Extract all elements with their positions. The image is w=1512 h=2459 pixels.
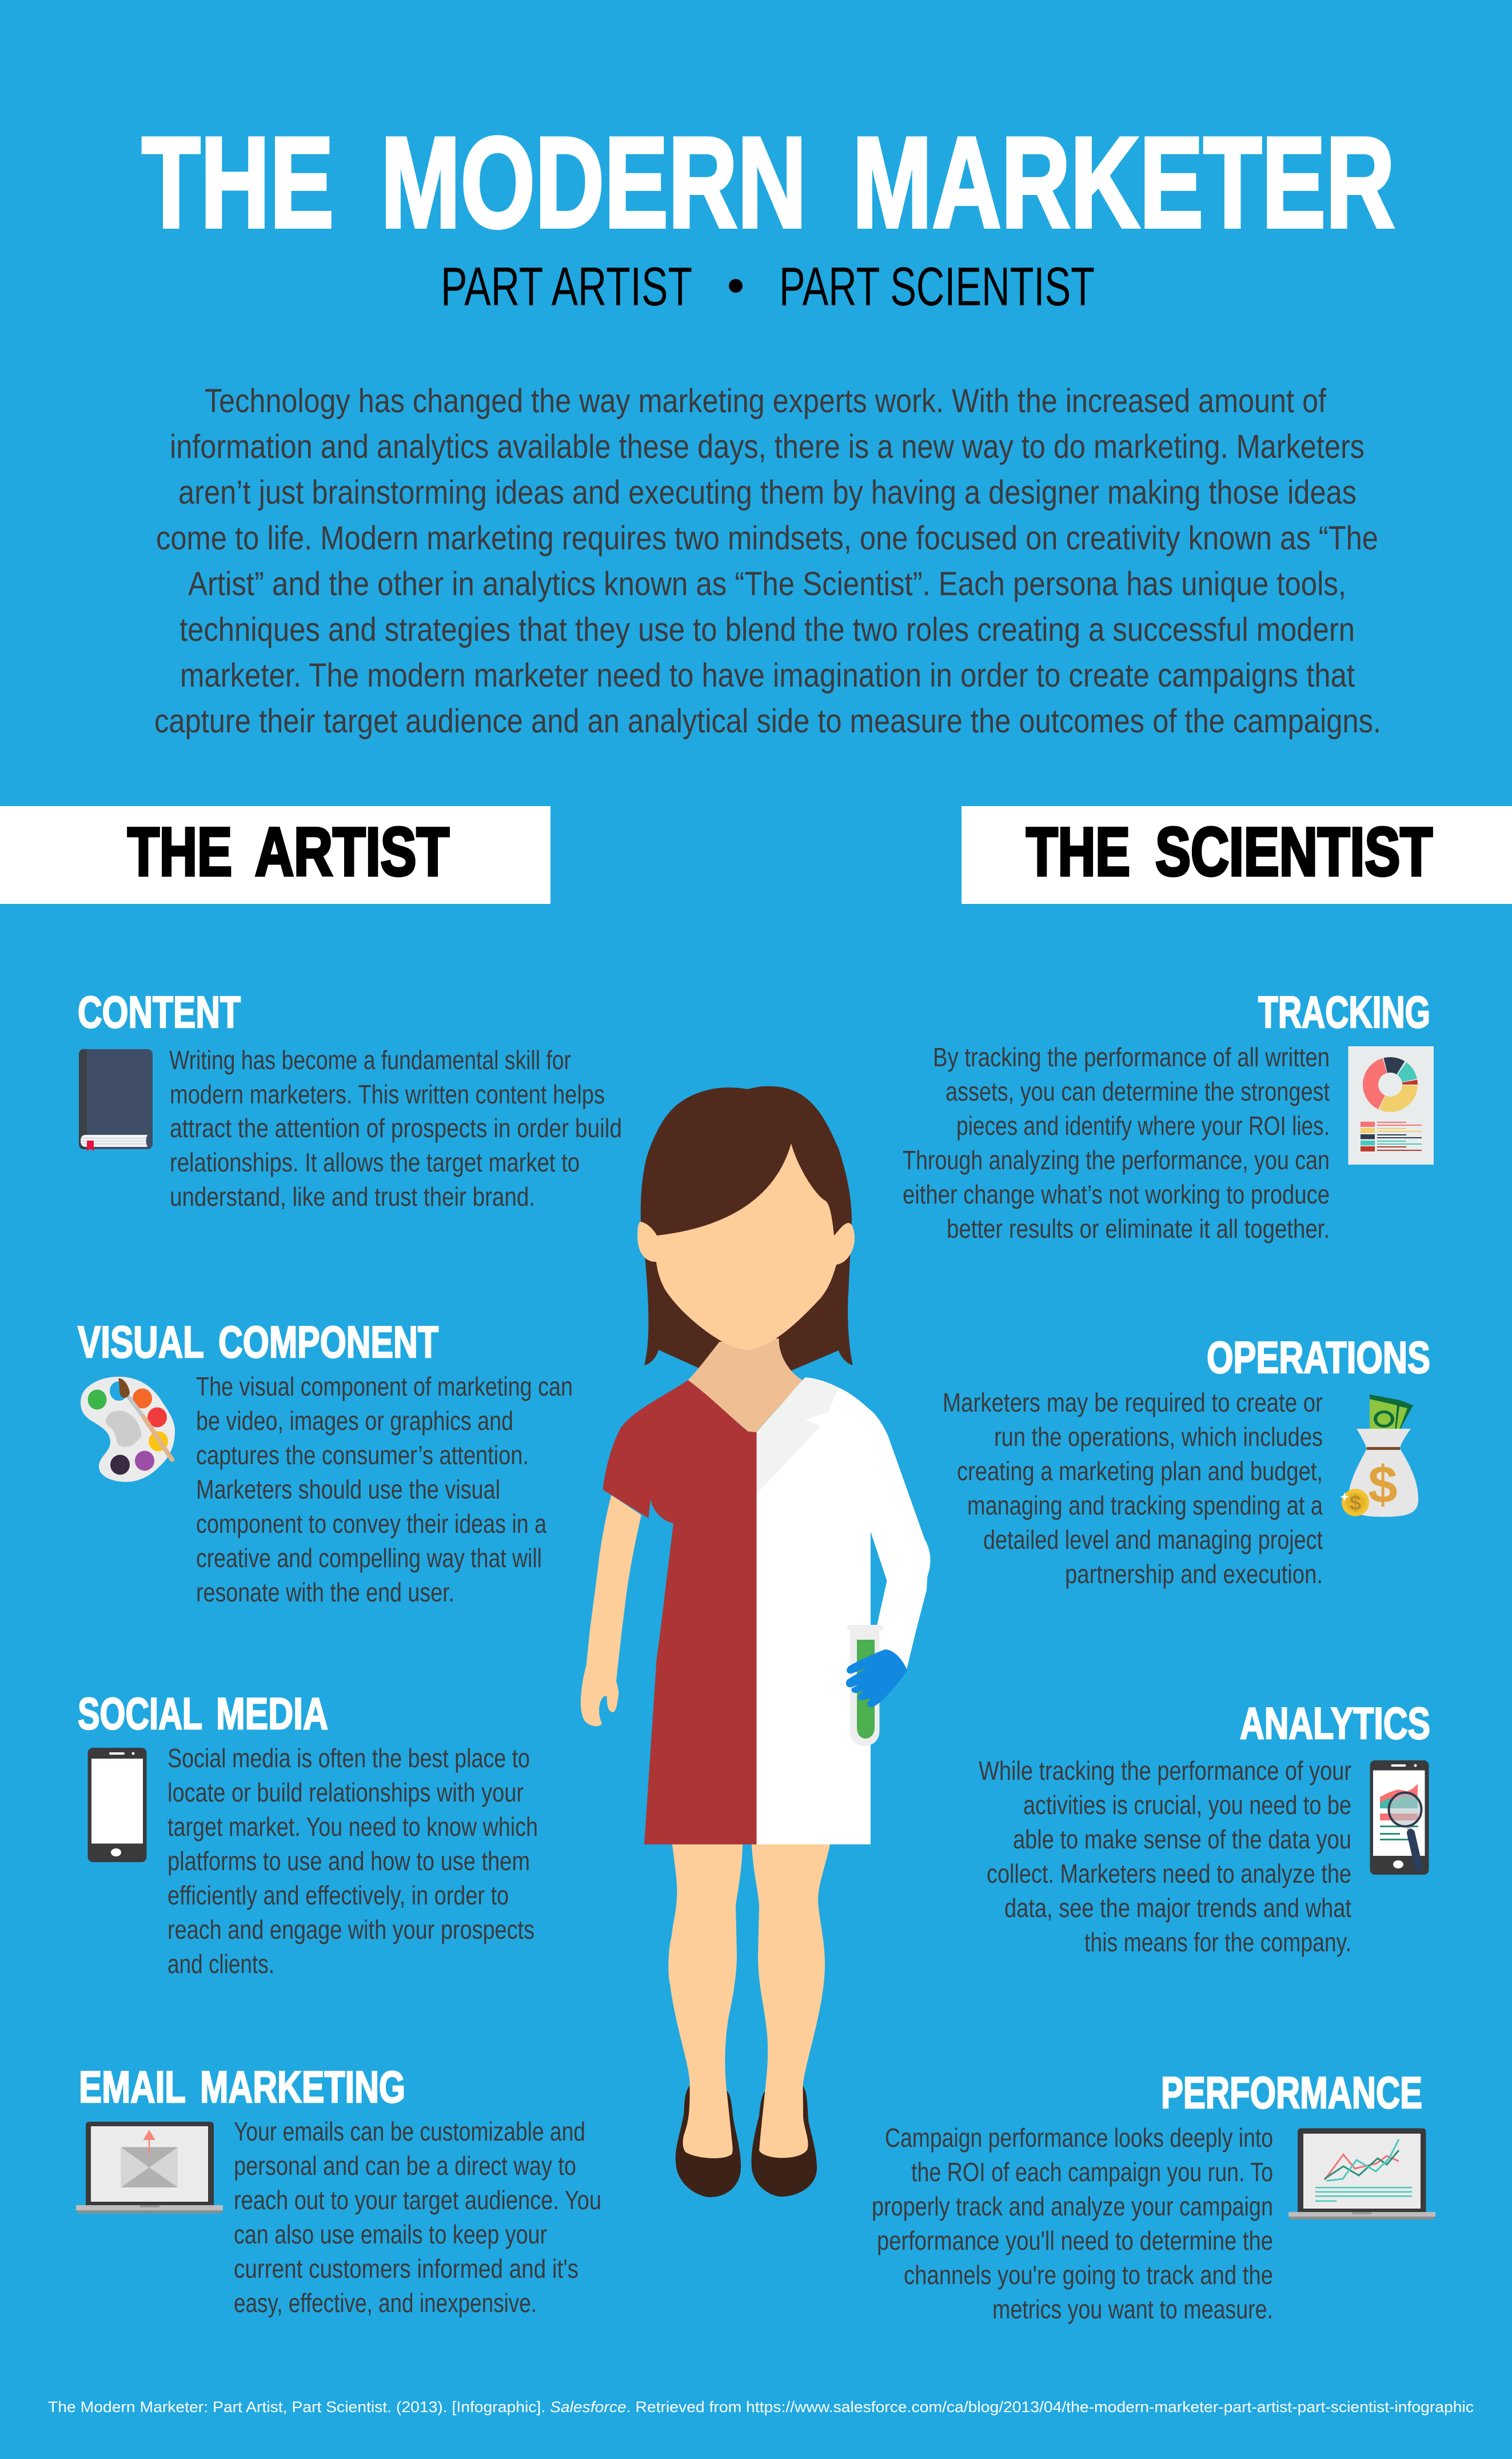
title: MODERN: [381, 110, 807, 254]
face and ears: [637, 1143, 855, 1350]
panel: social media: [78, 1688, 538, 1979]
heading: visual component: COMPONENT: [218, 1317, 438, 1367]
icon: smartphone: [88, 1748, 146, 1862]
body text: analytics: able to make sense of the data you: [1013, 1824, 1351, 1854]
intro paragraph: information and analytics available these days, there is a new way to do marketing. Marketers: [170, 428, 1365, 465]
heading: email marketing: EMAIL: [79, 2062, 186, 2112]
body text: performance: performance you'll need to determine the: [877, 2226, 1273, 2255]
body text: content: modern marketers. This written content helps: [170, 1079, 605, 1109]
body text: email marketing: easy, effective, and inexpensive.: [234, 2288, 537, 2318]
body text: tracking: pieces and identify where your ROI lies.: [956, 1111, 1330, 1141]
body text: visual component: The visual component of marketing can: [196, 1372, 573, 1401]
body text: visual component: captures the consumer’s attention.: [196, 1440, 529, 1470]
body text: content: understand, like and trust their brand.: [170, 1182, 535, 1211]
body text: email marketing: personal and can be a direct way to: [234, 2151, 576, 2181]
body text: email marketing: reach out to your target audience. You: [234, 2185, 601, 2215]
body text: visual component: be video, images or graphics and: [196, 1406, 513, 1436]
body text: visual component: [196, 1372, 573, 1607]
banner: the artist: [0, 806, 550, 904]
body text: operations: [943, 1388, 1323, 1589]
body text: performance: channels you're going to track and the: [904, 2260, 1273, 2290]
panel: performance: [872, 2067, 1435, 2324]
panel: email marketing: [76, 2062, 601, 2318]
body text: content: [169, 1045, 622, 1211]
body text: social media: target market. You need to know which: [167, 1812, 538, 1842]
body text: email marketing: Your emails can be customizable and: [234, 2117, 585, 2146]
heading: tracking: TRACKING: [1258, 987, 1430, 1037]
body text: tracking: [903, 1042, 1330, 1244]
banner: the artist: ARTIST: [255, 814, 449, 890]
body text: performance: Campaign performance looks deeply into: [885, 2123, 1273, 2153]
body text: social media: and clients.: [167, 1949, 274, 1979]
body text: operations: detailed level and managing project: [983, 1525, 1323, 1555]
body text: tracking: Through analyzing the performance, you can: [903, 1145, 1330, 1175]
icon: report with donut chart: [1348, 1046, 1434, 1165]
icon: money bag: $: [1350, 1491, 1361, 1515]
heading: social media: [78, 1688, 328, 1739]
banner: the scientist: THE: [1026, 814, 1130, 890]
body text: analytics: this means for the company.: [1084, 1927, 1351, 1957]
subtitle: PART ARTIST: [441, 256, 692, 317]
intro paragraph: Technology has changed the way marketing experts work. With the increased amount of: [205, 382, 1327, 420]
icon: laptop with email: [76, 2122, 223, 2213]
body text: tracking: assets, you can determine the strongest: [946, 1077, 1330, 1106]
heading: analytics: ANALYTICS: [1240, 1698, 1430, 1748]
icon: book: [79, 1049, 153, 1151]
body text: operations: Marketers may be required to create or: [943, 1388, 1323, 1417]
legs: [668, 1844, 830, 2158]
coat collar: [757, 1377, 839, 1494]
panel: operations: [943, 1332, 1430, 1589]
title: THE: [142, 110, 334, 254]
body text: social media: locate or build relationships with your: [167, 1778, 524, 1807]
body text: operations: partnership and execution.: [1065, 1559, 1323, 1589]
heading: social media: SOCIAL: [78, 1688, 202, 1739]
body text: visual component: creative and compelling way that will: [196, 1543, 542, 1573]
heading: operations: OPERATIONS: [1207, 1332, 1430, 1382]
body text: social media: Social media is often the best place to: [167, 1743, 530, 1773]
subtitle: [441, 256, 1095, 317]
body text: analytics: activities is crucial, you need to be: [1023, 1790, 1351, 1820]
body text: email marketing: can also use emails to keep your: [234, 2219, 547, 2249]
intro paragraph: aren’t just brainstorming ideas and executing them by having a designer making those ideas: [178, 474, 1357, 511]
body text: performance: properly track and analyze your campaign: [872, 2191, 1273, 2221]
intro paragraph: [154, 382, 1381, 740]
body text: social media: efficiently and effectively, in order to: [167, 1880, 509, 1910]
heading: email marketing: [79, 2062, 405, 2112]
body text: social media: platforms to use and how to use them: [167, 1846, 530, 1876]
body text: performance: metrics you want to measure.: [992, 2294, 1273, 2324]
subtitle: PART SCIENTIST: [779, 256, 1095, 317]
banner: the artist: THE: [127, 814, 232, 890]
heading: content: CONTENT: [78, 987, 241, 1037]
panel: content: [78, 987, 622, 1211]
title: [142, 110, 1395, 254]
icon: money bag: [1340, 1394, 1418, 1517]
body text: analytics: [979, 1756, 1351, 1957]
body text: content: attract the attention of prospects in order build: [170, 1113, 622, 1143]
heading: visual component: [78, 1317, 438, 1367]
left arm: [581, 1495, 641, 1726]
blue glove: [846, 1649, 907, 1707]
body text: performance: [872, 2123, 1273, 2324]
body text: analytics: data, see the major trends and what: [1004, 1893, 1351, 1923]
icon: phone with magnifier: [1370, 1760, 1429, 1875]
body text: social media: reach and engage with your prospects: [167, 1915, 534, 1944]
body text: analytics: collect. Marketers need to analyze the: [987, 1859, 1351, 1888]
heading: visual component: VISUAL: [78, 1317, 204, 1367]
illustration: half artist, half scientist woman: [581, 1086, 931, 2197]
neck: [688, 1338, 803, 1432]
panel: visual component: [78, 1317, 573, 1607]
icon: paint palette: [81, 1377, 175, 1482]
red dress half: [603, 1380, 757, 1844]
body text: content: relationships. It allows the target market to: [170, 1147, 580, 1177]
body text: tracking: By tracking the performance of all written: [933, 1042, 1330, 1072]
body text: email marketing: [234, 2117, 601, 2318]
body text: operations: managing and tracking spending at a: [967, 1490, 1323, 1520]
banner: the scientist: SCIENTIST: [1155, 814, 1433, 890]
body text: tracking: either change what’s not working to produce: [903, 1179, 1330, 1209]
body text: operations: run the operations, which includes: [994, 1422, 1323, 1452]
body text: analytics: While tracking the performance of your: [979, 1756, 1351, 1786]
intro paragraph: techniques and strategies that they use to blend the two roles creating a successful modern: [179, 611, 1355, 648]
icon: money bag: $: [1368, 1456, 1398, 1514]
body text: tracking: better results or eliminate it all together.: [947, 1214, 1330, 1244]
test tube: [847, 1625, 884, 1746]
heading: performance: PERFORMANCE: [1161, 2067, 1422, 2118]
panel: analytics: [979, 1698, 1430, 1957]
heading: email marketing: MARKETING: [200, 2062, 405, 2112]
intro paragraph: marketer. The modern marketer need to have imagination in order to create campaigns that: [180, 657, 1355, 694]
shoes: [676, 2086, 817, 2197]
citation footer: The Modern Marketer: Part Artist, Part Scientist. (2013). [Infographic]. Salesforce. Retrieved from https://www.salesforce.com/ca/blog/2013/04/the-modern-marketer-part-artist-part-scientist-infographic: [48, 2398, 1474, 2416]
panel: tracking: [903, 987, 1434, 1244]
body text: performance: the ROI of each campaign you run. To: [911, 2157, 1273, 2187]
hair: [641, 1086, 853, 1370]
body text: operations: creating a marketing plan and budget,: [957, 1456, 1323, 1486]
body text: content: Writing has become a fundamental skill for: [169, 1045, 571, 1075]
body text: visual component: Marketers should use the visual: [196, 1474, 500, 1504]
body text: visual component: resonate with the end user.: [196, 1577, 454, 1607]
body text: email marketing: current customers informed and it's: [234, 2254, 579, 2283]
icon: laptop with line chart: [1288, 2128, 1435, 2219]
body text: visual component: component to convey their ideas in a: [196, 1509, 546, 1539]
body text: social media: [167, 1743, 538, 1979]
heading: social media: MEDIA: [216, 1688, 328, 1739]
white lab coat half: [757, 1377, 931, 1844]
intro paragraph: Artist” and the other in analytics known as “The Scientist”. Each persona has unique tools,: [188, 565, 1346, 603]
banner: the scientist: [962, 806, 1512, 904]
